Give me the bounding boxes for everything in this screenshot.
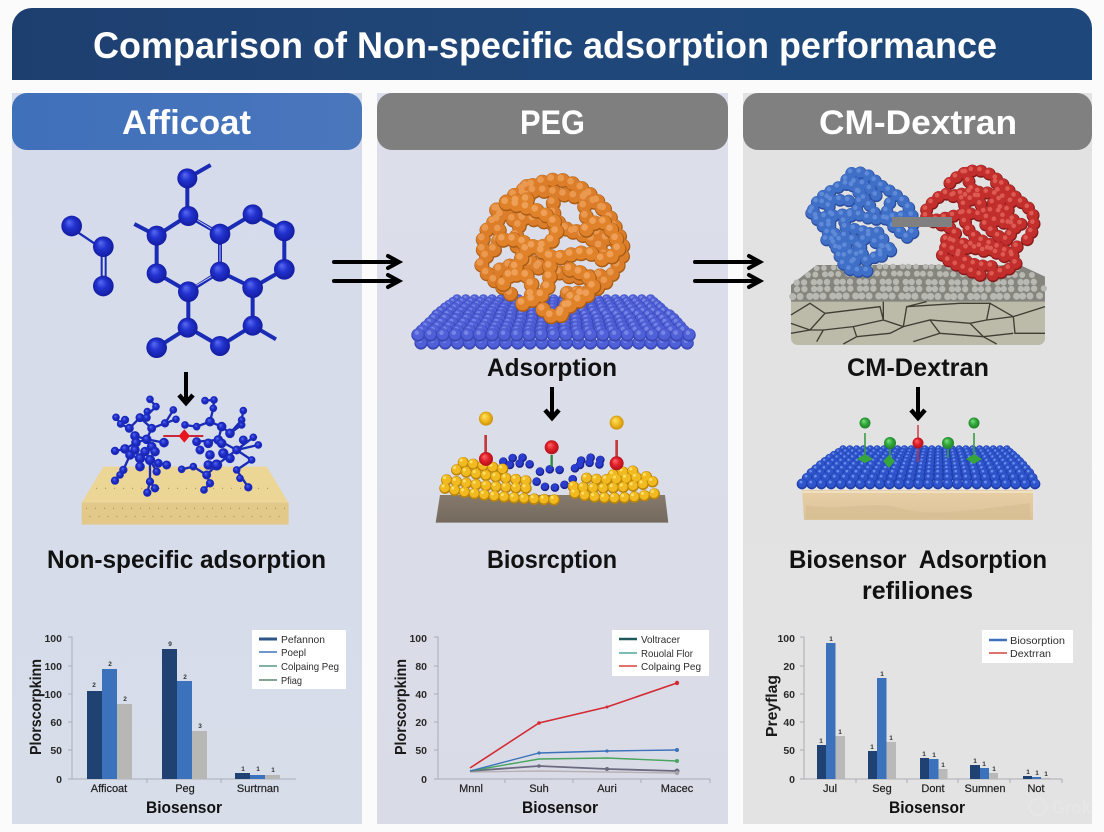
bar chart: Afficoat: Plorscorpkinn (28, 659, 45, 755)
heading: Afficoat: Afficoat (122, 104, 251, 142)
arrow: down to surface (545, 387, 559, 418)
bar chart: Afficoat: Biosensor (146, 798, 222, 817)
heading: Afficoat (12, 93, 362, 150)
red protein globule (925, 169, 1034, 278)
line chart: PEG: Macec (661, 783, 694, 795)
arrow: Afficoat to PEG (334, 256, 399, 287)
bar chart: CM-Dextran: Biosensor (889, 798, 965, 817)
bar chart: CM-Dextran: Not (1027, 783, 1045, 795)
bar chart: Afficoat: 2 (108, 661, 112, 668)
linker bar (892, 217, 952, 227)
legend: Dextrran (1010, 648, 1051, 660)
line chart: PEG: 40 (415, 689, 427, 701)
bar chart: Afficoat (28, 630, 346, 817)
bar chart: CM-Dextran: 20 (783, 661, 795, 673)
bar chart: CM-Dextran: 1 (838, 729, 842, 736)
bar chart: Afficoat: 1 (256, 766, 260, 773)
bar chart: Afficoat: 60 (50, 717, 62, 729)
bar chart: CM-Dextran: 1 (1044, 771, 1048, 778)
line chart: PEG: 50 (415, 745, 427, 757)
surface with gold and blue particles (436, 412, 668, 523)
heading: PEG: PEG (520, 104, 585, 142)
bar chart: CM-Dextran: 1 (941, 762, 945, 769)
bar chart: CM-Dextran: 1 (992, 766, 996, 773)
caption: Biosensor Adsorption refiliones (789, 546, 1047, 605)
bar chart: CM-Dextran: 0 (789, 774, 795, 786)
line chart: PEG: 0 (421, 774, 427, 786)
bar chart: Afficoat: 100 (44, 633, 62, 645)
bar chart: Afficoat: 50 (50, 745, 62, 757)
bar chart: CM-Dextran: 1 (1026, 769, 1030, 776)
bar chart: CM-Dextran: 1 (1035, 770, 1039, 777)
blue sphere lattice (417, 297, 690, 343)
caption: Biosensor Adsorption refiliones: refiliones (862, 577, 973, 605)
bar chart: Afficoat: 1 (271, 767, 275, 774)
bar chart: Afficoat: 3 (198, 723, 202, 730)
legend: Pfiag (281, 675, 302, 687)
title banner: Comparison of Non-specific adsorption performance (93, 25, 997, 66)
bar chart: CM-Dextran: Sumnen (965, 783, 1005, 795)
bar chart: Afficoat: Afficoat (91, 783, 127, 795)
panel: CM-Dextran (743, 93, 1092, 824)
heading: CM-Dextran: CM-Dextran (819, 104, 1017, 142)
line chart: PEG: 100 (409, 633, 427, 645)
bar chart: CM-Dextran: 1 (889, 735, 893, 742)
line chart: PEG: Mnnl (459, 783, 483, 795)
bar chart: CM-Dextran: 1 (880, 671, 884, 678)
bar chart: CM-Dextran: 50 (783, 745, 795, 757)
bar chart: CM-Dextran: 1 (829, 636, 833, 643)
bar chart: CM-Dextran: 1 (819, 738, 823, 745)
bar chart: CM-Dextran: 60 (783, 689, 795, 701)
legend (252, 630, 346, 689)
bar chart: CM-Dextran: 1 (870, 744, 874, 751)
surface with adsorbed clusters (82, 396, 289, 525)
panel: Afficoat (12, 93, 362, 824)
legend: Voltracer (641, 634, 680, 646)
caption: Biosensor Adsorption refiliones: Biosensor Adsorption (789, 546, 1047, 574)
label: CM-Dextran: CM-Dextran (847, 354, 989, 382)
bar chart: Afficoat: 2 (92, 682, 96, 689)
legend: Colpaing Peg (281, 661, 339, 673)
arrow: down to surface (179, 372, 193, 403)
line chart: PEG: Biosensor (522, 798, 598, 817)
arrow: down to surface (911, 387, 925, 418)
bar chart: CM-Dextran: 1 (982, 761, 986, 768)
bar chart: CM-Dextran: 1 (973, 758, 977, 765)
caption: Biosrcption: Biosrcption (487, 546, 617, 574)
bar chart: CM-Dextran: 40 (783, 717, 795, 729)
bar chart: Afficoat: Surtrnan (237, 783, 279, 795)
line chart: PEG: Plorscorpkinn (393, 659, 410, 755)
line chart: PEG (393, 630, 710, 817)
bar chart: CM-Dextran: 1 (932, 752, 936, 759)
legend: Poepl (281, 647, 306, 659)
molecule: small and fused-ring structure (61, 165, 295, 358)
legend: Biosorption (1010, 635, 1065, 647)
legend: Rouolal Flor (641, 648, 693, 660)
legend (612, 630, 709, 676)
line chart: PEG: Suh (529, 783, 549, 795)
caption: Non-specific adsorption: Non-specific adsorption (47, 546, 326, 574)
dextran matrix on cracked substrate (791, 265, 1047, 345)
watermark: Grok: Grok (1052, 798, 1091, 819)
bar chart: CM-Dextran: Jul (823, 783, 837, 795)
bar chart: CM-Dextran: Seg (872, 783, 892, 795)
line chart: PEG: 80 (415, 661, 427, 673)
bar chart: Afficoat: 2 (123, 696, 127, 703)
title banner (12, 8, 1092, 80)
bar chart: Afficoat: 100 (44, 689, 62, 701)
arrow: PEG to CM-Dextran (695, 256, 760, 287)
legend: Colpaing Peg (641, 661, 701, 673)
bar chart: CM-Dextran: Preyflag (764, 675, 781, 737)
bar chart: CM-Dextran: 1 (922, 751, 926, 758)
orange polymer globule (480, 177, 623, 320)
bar chart: Afficoat: 1 (241, 766, 245, 773)
blue protein globule (810, 170, 914, 272)
legend: Pefannon (281, 634, 325, 646)
bar chart: Afficoat: 9 (168, 641, 172, 648)
surface with ligands (801, 418, 1036, 520)
line chart: PEG: Auri (597, 783, 617, 795)
label: Adsorption: Adsorption (487, 354, 617, 382)
line chart: PEG: 20 (415, 717, 427, 729)
bar chart: Afficoat: Peg (175, 783, 195, 795)
watermark: Grok (1030, 798, 1091, 819)
legend (982, 630, 1073, 663)
heading: CM-Dextran (743, 93, 1092, 150)
bar chart: CM-Dextran: Dont (921, 783, 945, 795)
bar chart: Afficoat: 0 (56, 774, 62, 786)
bar chart: Afficoat: 2 (183, 674, 187, 681)
bar chart: Afficoat: 100 (44, 661, 62, 673)
heading: PEG (377, 93, 728, 150)
panel: PEG (377, 93, 728, 824)
bar chart: CM-Dextran (764, 630, 1073, 817)
bar chart: CM-Dextran: 100 (777, 633, 795, 645)
